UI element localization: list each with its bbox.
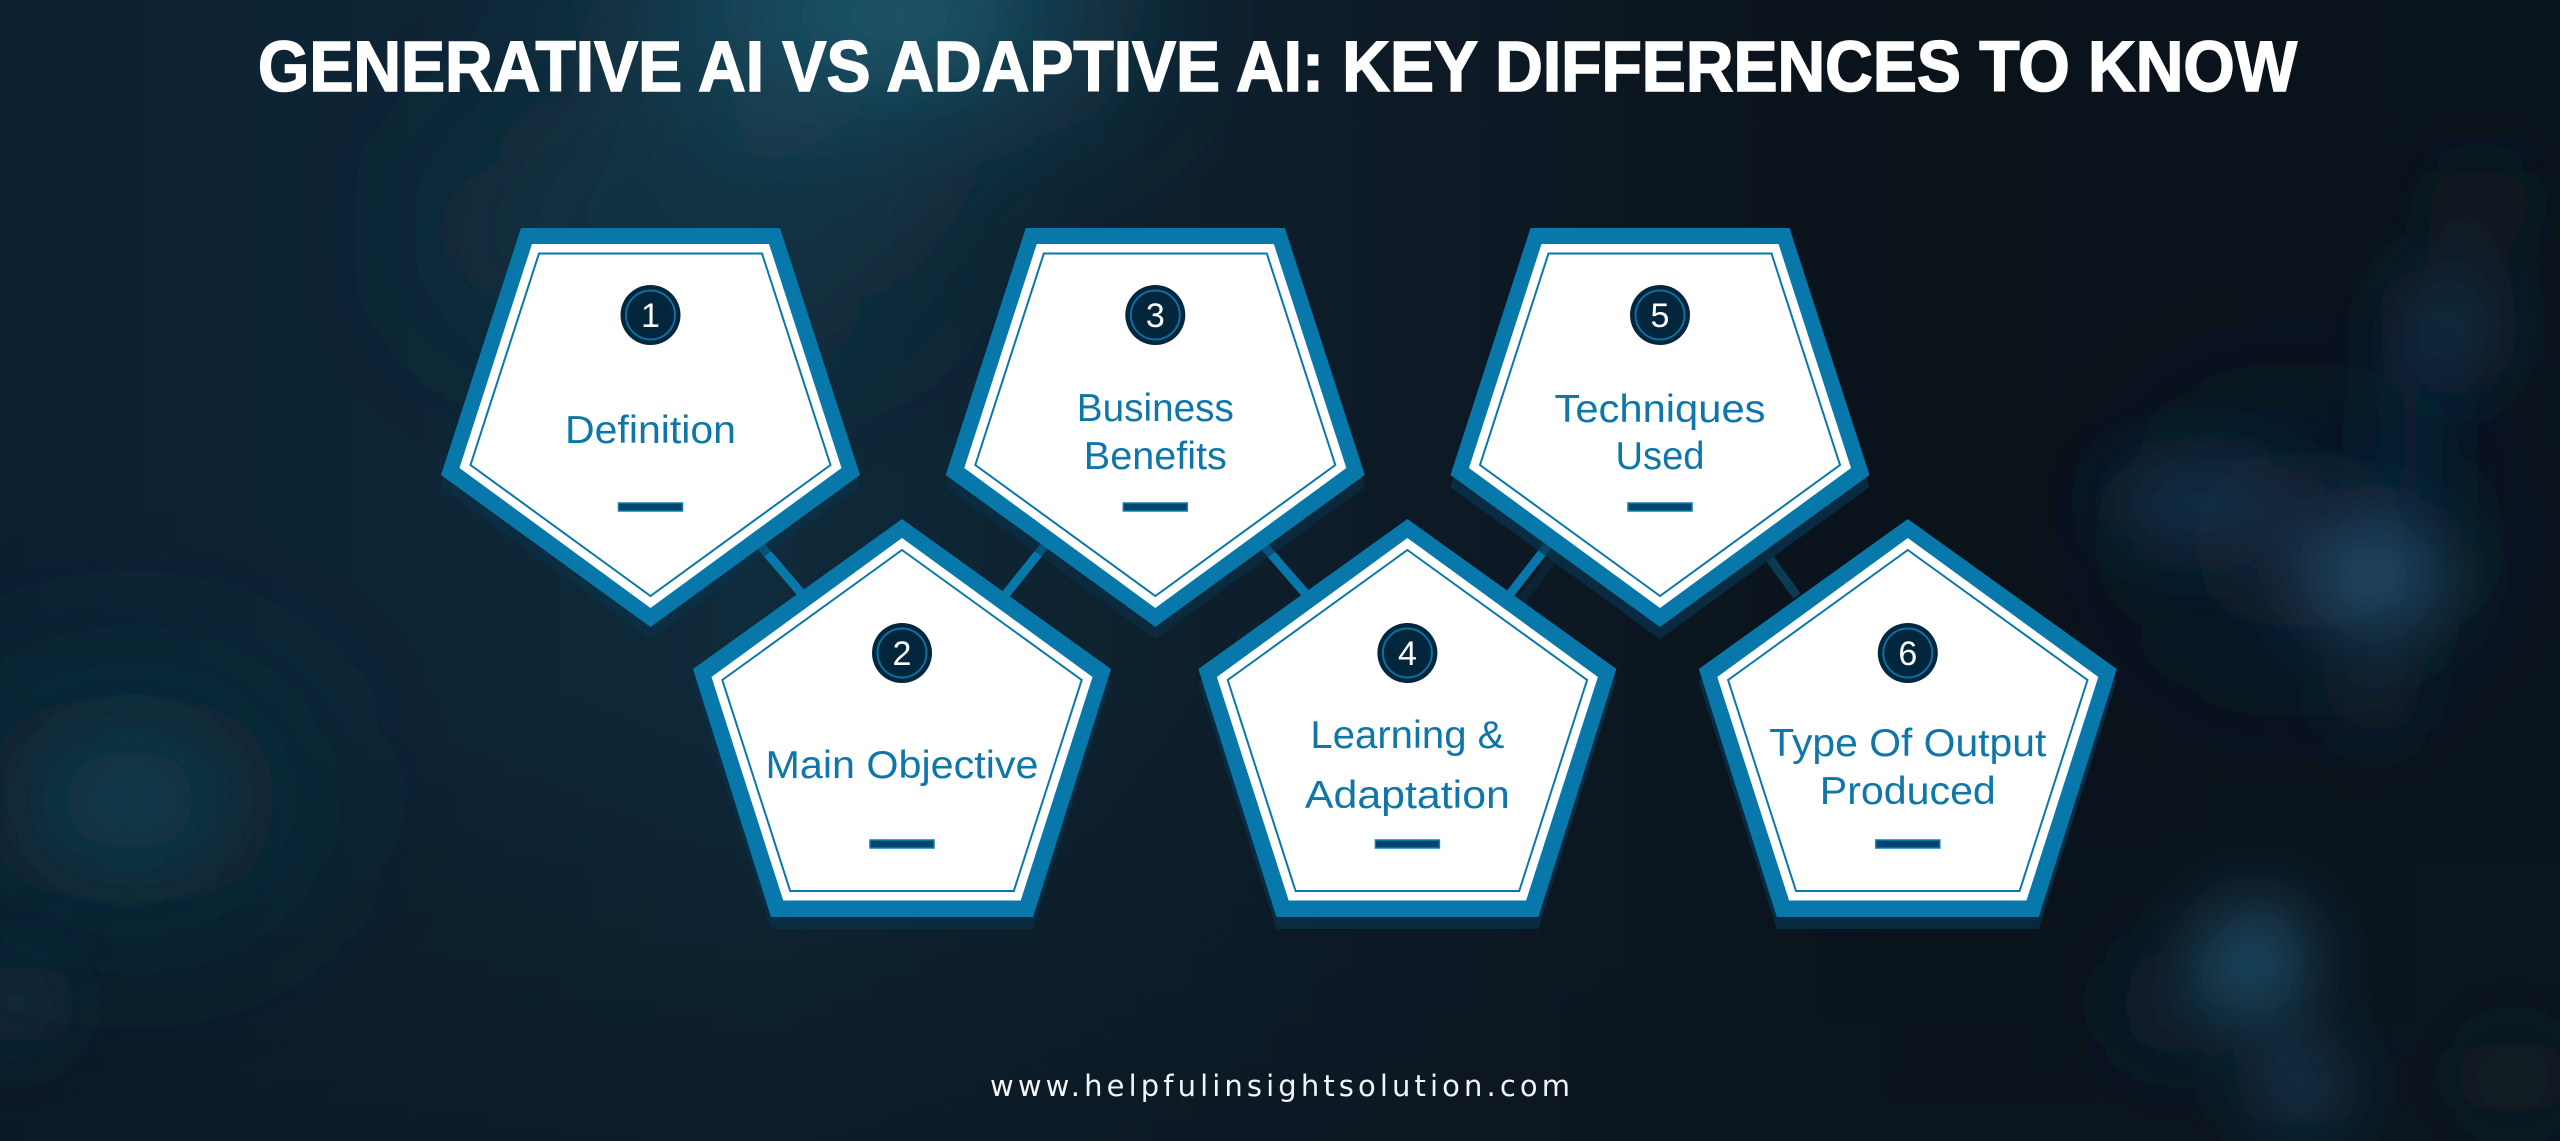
badge 5 [1630,285,1690,345]
pentagon 5: Techniques Used [1450,228,1870,639]
label: Type Of Output Produced: Type Of Output [1769,722,2046,765]
label: Learning & Adaptation [1305,714,1510,817]
dash [618,503,682,511]
pentagon 2: Main Objective [693,519,1111,929]
website footer: www.helpfulinsightsolution.com [990,1069,1570,1103]
badge 4 [1377,623,1437,683]
badge 1: 1 [641,297,660,335]
label: Business Benefits: Business [1077,387,1234,430]
pentagon 6: Type Of Output Produced [1699,519,2117,929]
pentagon 3: Business Benefits [946,228,1365,639]
dash [870,840,934,848]
dash [1123,503,1187,511]
label: Techniques Used [1554,388,1766,478]
pentagon 1: Definition [441,228,860,639]
label: Learning & Adaptation: Adaptation [1305,774,1510,817]
badge 6 [1878,623,1938,683]
label: Type Of Output Produced: Produced [1820,770,1996,813]
label: Learning & Adaptation: Learning & [1310,714,1504,757]
badge 3: 3 [1146,297,1165,335]
label: Type Of Output Produced [1769,722,2046,813]
label: Business Benefits [1077,387,1234,478]
label: Business Benefits: Benefits [1084,435,1227,478]
dash [1628,503,1692,511]
title: GENERATIVE AI VS ADAPTIVE AI: KEY DIFFERENCES TO KNOW [258,28,2297,107]
label: Techniques Used: Techniques [1554,388,1766,431]
connectors between pentagons [760,544,1797,600]
badge 2 [872,623,932,683]
badge 5: 5 [1651,297,1669,335]
label: Techniques Used: Used [1616,435,1704,478]
badge 2: 2 [893,635,911,673]
pentagon 4: Learning & Adaptation [1198,519,1616,929]
dash [1375,840,1439,848]
label: Main Objective: Main Objective [766,744,1038,787]
badge 3 [1125,285,1185,345]
badge 4: 4 [1398,635,1417,673]
dash [1876,840,1940,848]
badge 1 [620,285,680,345]
badge 6: 6 [1898,635,1917,673]
label: Definition: Definition [565,409,736,452]
